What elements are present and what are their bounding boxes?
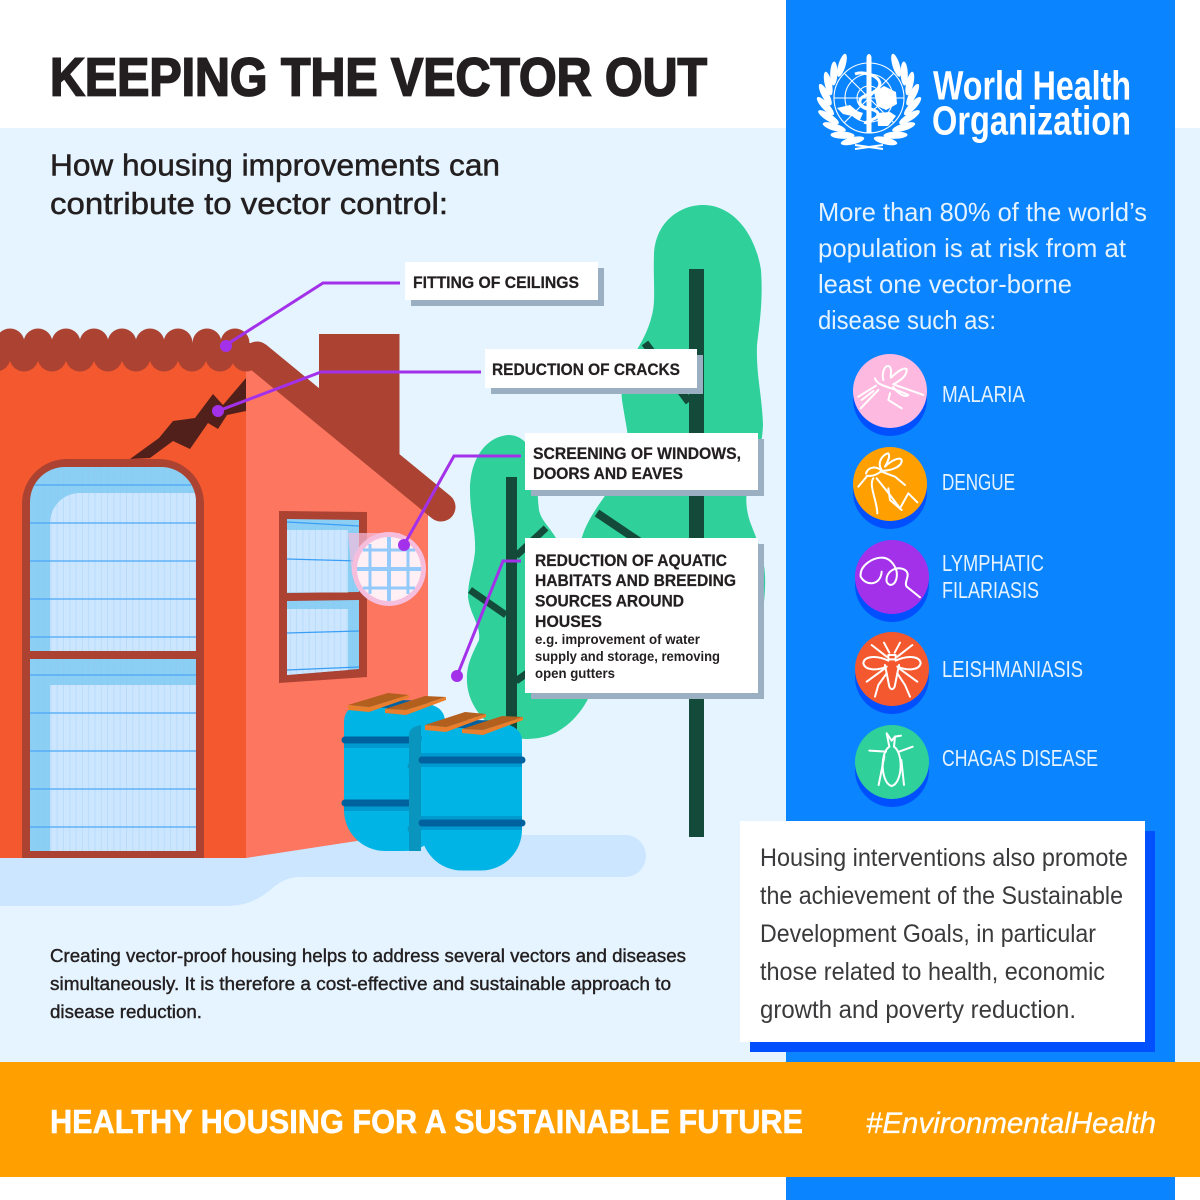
small tree [467, 435, 590, 739]
disease: chagas [855, 725, 1098, 807]
icon: mosquito [853, 447, 927, 529]
text block: global risk: More than 80% of the world’s [818, 197, 1147, 227]
wall crack [130, 378, 246, 459]
body text: cost-effective approach [50, 946, 686, 1022]
callout: aquatic habitats: SOURCES AROUND [535, 592, 684, 610]
callout: sustainable development goals: Development Goals, in particular [760, 920, 1096, 948]
disease: lymphatic filariasis [855, 540, 1044, 622]
callout: fitting of ceilings [220, 262, 604, 352]
footer banner: #EnvironmentalHealth [866, 1107, 1156, 1140]
label: CHAGAS DISEASE [942, 745, 1098, 771]
label: FILARIASIS [942, 577, 1039, 603]
callout: screening: SCREENING OF WINDOWS, [533, 444, 741, 463]
panel: blue WHO column [786, 0, 1175, 1200]
back barrel [344, 693, 446, 851]
callout: aquatic habitats: open gutters [535, 666, 615, 681]
callout: sustainable development goals: Housing interventions also promote [760, 844, 1128, 872]
disease: leishmaniasis [855, 632, 1083, 714]
front wall [0, 360, 246, 858]
footer banner [0, 1062, 1200, 1177]
callout: aquatic habitats: REDUCTION OF AQUATIC [535, 551, 727, 570]
illustration: house [0, 328, 441, 858]
magnified screen [348, 532, 426, 606]
body text: cost-effective approach: simultaneously. It is therefore a cost-effective and sustainable approach to [50, 974, 671, 994]
callout: fitting of ceilings: FITTING OF CEILINGS [413, 273, 579, 292]
icon: WHO emblem [815, 53, 923, 149]
title: KEEPING THE VECTOR OUT [50, 48, 707, 108]
callout: reduction of cracks: REDUCTION OF CRACKS [492, 360, 680, 379]
background panel: light blue page [0, 128, 1200, 1062]
callout: sustainable development goals: the achievement of the Sustainable [760, 882, 1123, 910]
subtitle: How housing improvements can [50, 148, 500, 182]
front barrel [421, 712, 523, 870]
icon: mosquito [853, 354, 927, 436]
big tree [580, 205, 765, 837]
illustration: trees [467, 205, 765, 837]
callout: aquatic habitats: supply and storage, removing [535, 649, 720, 664]
icon: worm [855, 540, 929, 622]
icon: sandfly [855, 632, 929, 714]
body text: cost-effective approach: disease reduction. [50, 1002, 202, 1022]
callout: sustainable development goals: those related to health, economic [760, 958, 1105, 986]
callout: reduction of cracks [212, 349, 703, 417]
callout: screening: DOORS AND EAVES [533, 464, 683, 483]
roof tiles [0, 328, 260, 372]
body text: cost-effective approach: Creating vector-proof housing helps to address several vectors and diseases [50, 946, 686, 966]
icon: kissing bug [855, 725, 929, 807]
callout: aquatic habitats: HOUSES [535, 612, 602, 631]
chimney [319, 334, 400, 470]
callout: aquatic habitats [451, 538, 764, 699]
disease: dengue [853, 447, 1015, 529]
side window [279, 511, 367, 683]
ground [0, 835, 646, 906]
text block: global risk: population is at risk from at [818, 233, 1127, 263]
roof slope [257, 356, 441, 507]
label: MALARIA [942, 381, 1026, 407]
subtitle: contribute to vector control: [50, 186, 448, 221]
label [942, 550, 1044, 603]
callout: aquatic habitats: HABITATS AND BREEDING [535, 571, 736, 590]
side wall [246, 368, 428, 858]
text block: global risk: least one vector-borne [818, 269, 1072, 299]
subtitle [50, 148, 500, 221]
footer banner: HEALTHY HOUSING FOR A SUSTAINABLE FUTURE [50, 1103, 803, 1140]
label: DENGUE [942, 469, 1015, 495]
callout: aquatic habitats: e.g. improvement of water [535, 632, 701, 647]
text block: global risk: disease such as: [818, 305, 996, 335]
text block: global risk [818, 197, 1147, 335]
wordmark [932, 62, 1131, 144]
wordmark: Organization [932, 98, 1131, 144]
label: LYMPHATIC [942, 550, 1044, 576]
label: LEISHMANIASIS [942, 656, 1083, 682]
illustration: barrels [344, 693, 523, 870]
callout: screening [398, 433, 764, 551]
wordmark: World Health [933, 62, 1131, 108]
door [22, 459, 204, 858]
callout: sustainable development goals [740, 821, 1155, 1052]
disease: malaria [853, 354, 1026, 436]
logo: WHO [815, 53, 1131, 149]
callout: sustainable development goals: growth and poverty reduction. [760, 996, 1076, 1024]
